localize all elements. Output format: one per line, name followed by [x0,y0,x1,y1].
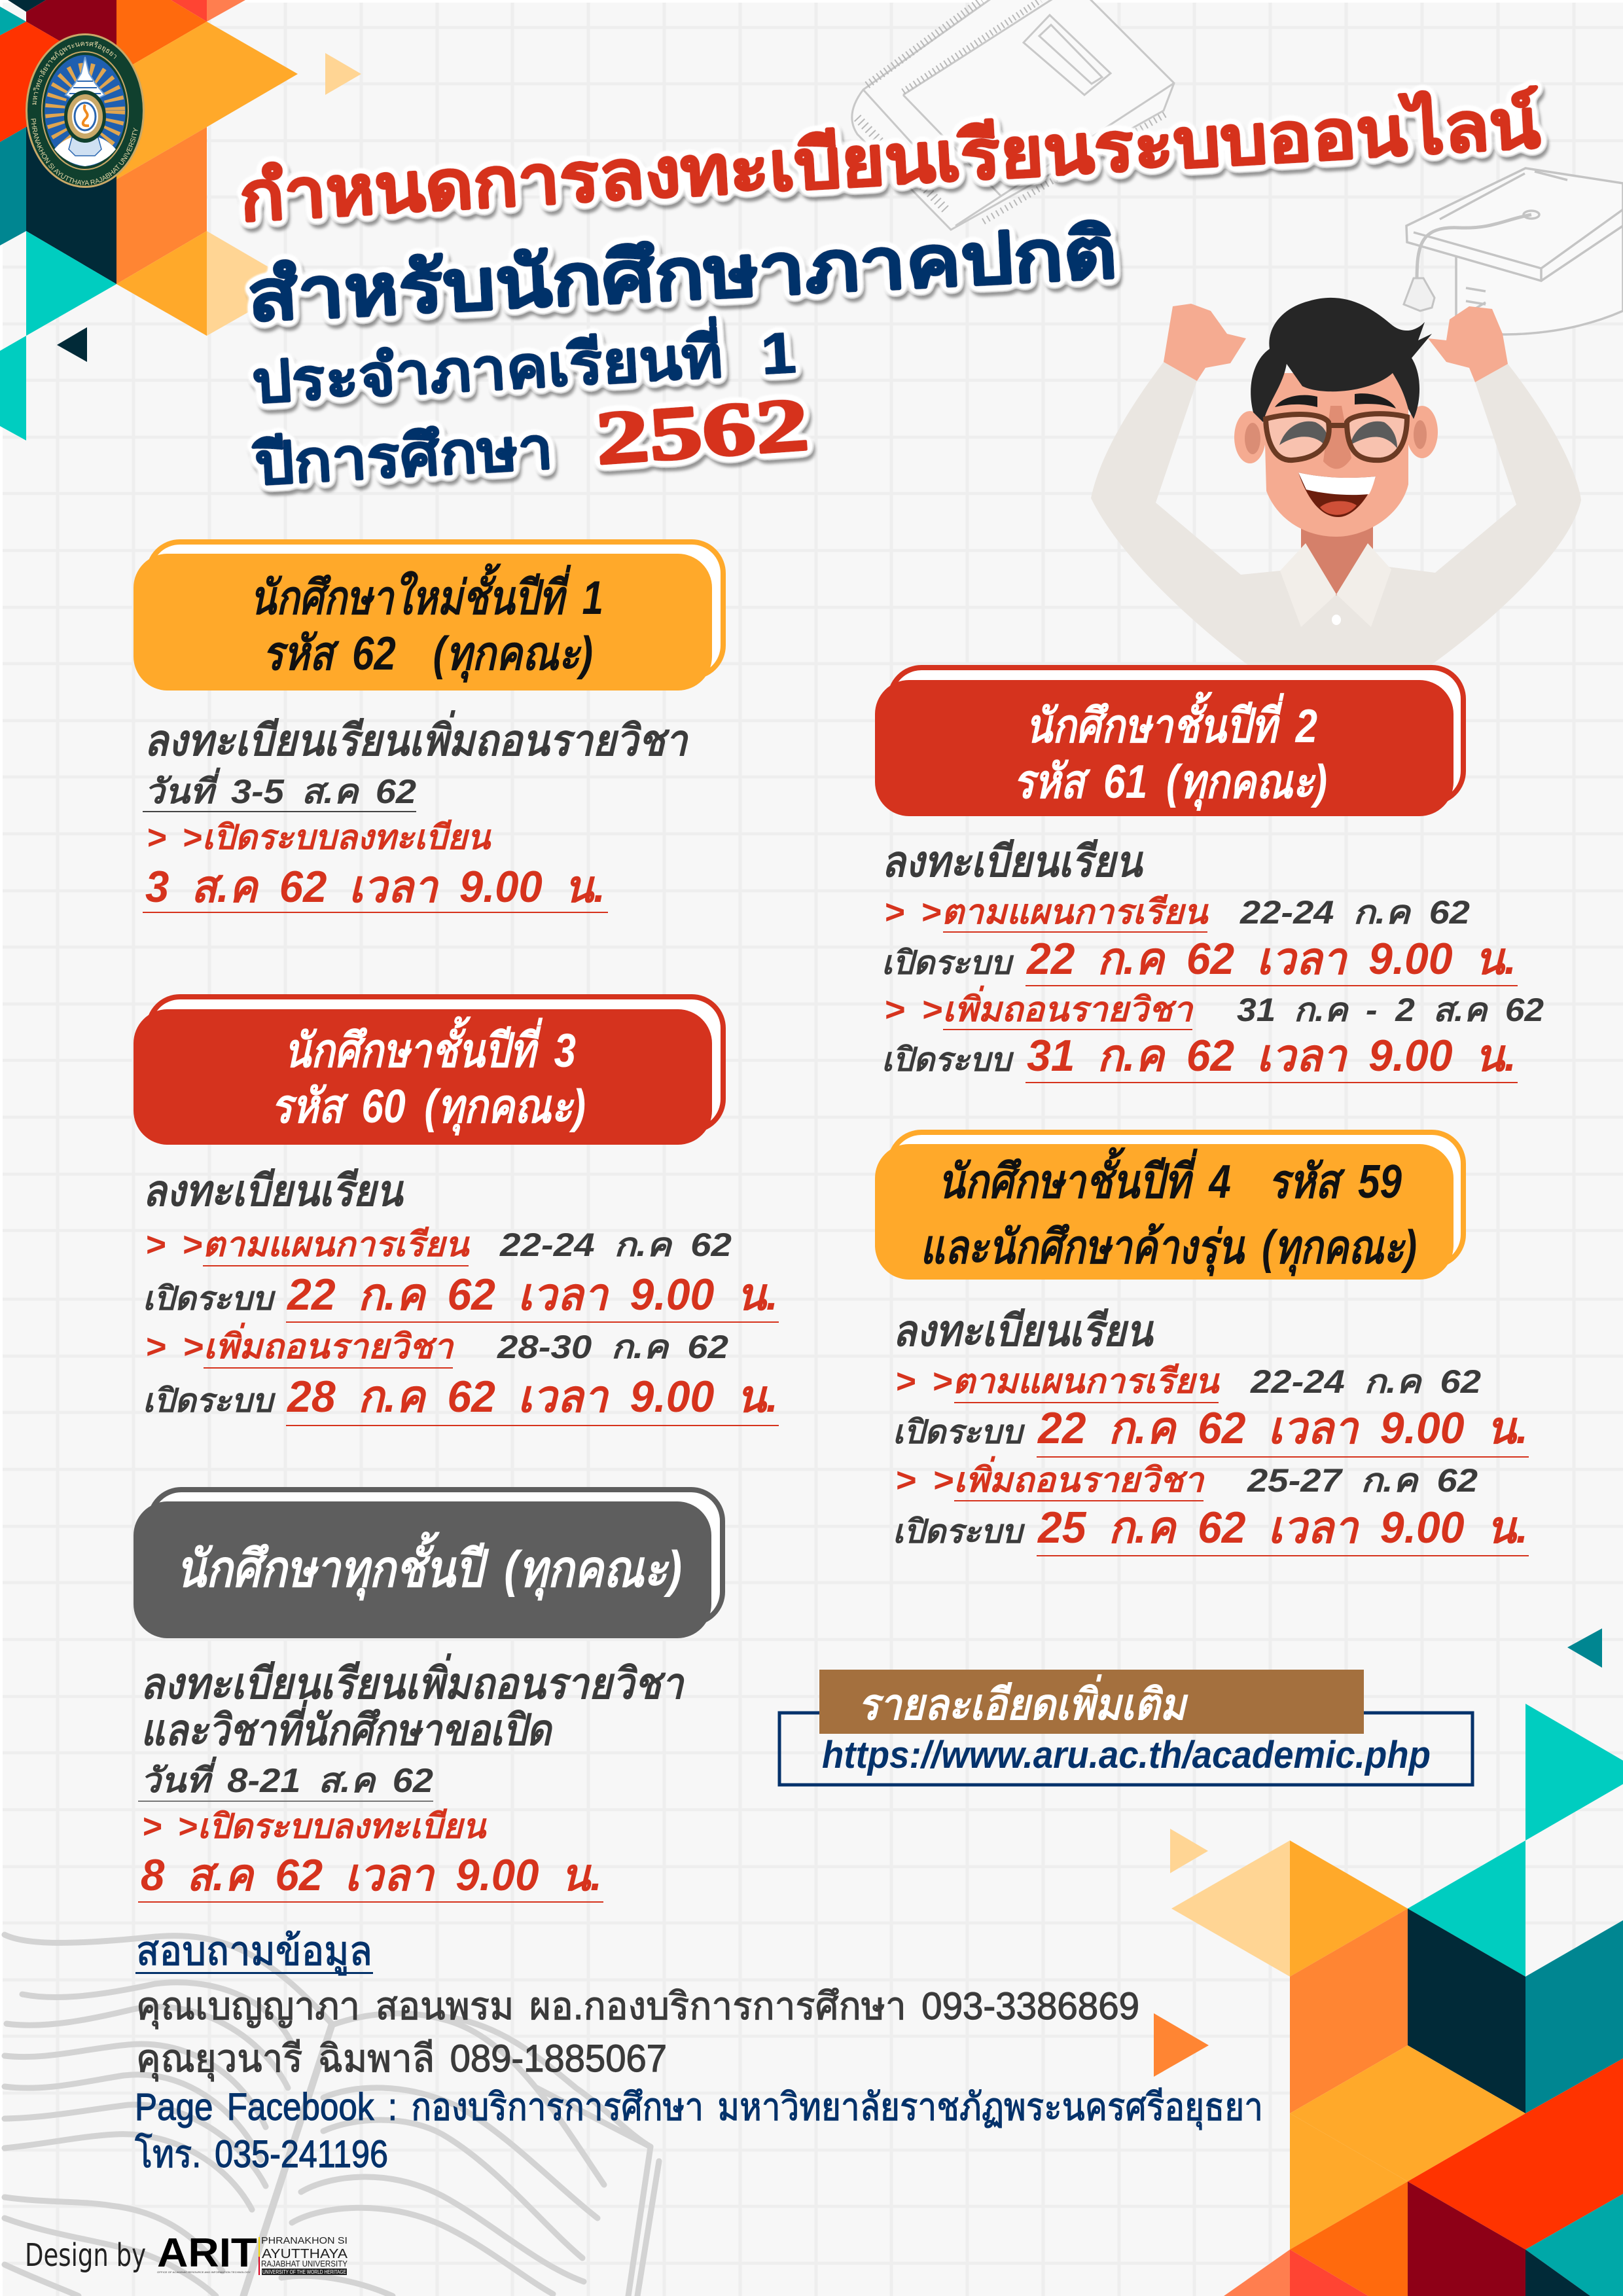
text block: all years dates [138,1653,685,1903]
text block: second year dates: เปิดระบบ [882,1041,1014,1078]
title: line 1: กำหนดการลงทะเบียนเรียนระบบออนไลน์ [238,84,1542,236]
text block: fourth year dates: เปิดระบบ [893,1414,1026,1450]
logo: university seal: มหาวิทยาลัยราชภัฏพระนครศรีอยุธยา [32,42,116,105]
credit: design by ARIT [25,2231,348,2276]
credit: design by ARIT: OFFICE OF ACADEMIC RESOURCE AND INFORMATION TECHNOLOGY [157,2270,251,2274]
text block: third year dates: > >เพิ่มถอนรายวิชา [145,1322,455,1366]
text block: second year dates: > >เพิ่มถอนรายวิชา [884,985,1194,1029]
mouth [1298,473,1376,517]
panel: fourth year heading: และนักศึกษาค้างรุ่น (ทุกคณะ) [920,1221,1417,1276]
text block: third year dates: เปิดระบบ [143,1280,276,1317]
panel: third year heading: รหัส 60 (ทุกคณะ) [271,1081,586,1136]
text block: third year dates: 28-30 ก.ค 62 [497,1329,728,1365]
hands [1164,304,1246,381]
text block: contact information: คุณเบญญาภา สอนพรม ผอ.กองบริการการศึกษา 093-3386869 [136,1985,1139,2030]
text block: second year dates: > >ตามแผนการเรียน [884,893,1209,931]
text block: third year dates: เปิดระบบ [143,1382,276,1419]
title: line 4: ปีการศึกษา [251,416,554,497]
decoration: closed book line art [852,0,1174,230]
text block: fourth year dates: 25-27 ก.ค 62 [1247,1462,1478,1499]
logo: university seal [26,33,145,188]
credit: design by ARIT: AYUTTHAYA [262,2247,348,2261]
panel: third year heading: นักศึกษาชั้นปีที่ 3 [284,1016,576,1077]
text block: third year dates: 28 ก.ค 62 เวลา 9.00 น. [286,1372,778,1422]
nose [1323,406,1351,469]
text block: second year dates [882,837,1544,1083]
text block: contact information: สอบถามข้อมูล [136,1929,372,1975]
callout: more details link [779,1670,1472,1785]
text block: contact information: คุณยุวนารี ฉิมพาลี 089-1885067 [136,2037,667,2082]
ears [1234,411,1266,463]
text block: first year dates: วันที่ 3-5 ส.ค 62 [144,767,416,811]
text block: fourth year dates: 22 ก.ค 62 เวลา 9.00 น. [1037,1403,1528,1453]
callout: more details link: https://www.aru.ac.th/academic.php [822,1734,1431,1776]
text block: third year dates: > >ตามแผนการเรียน [145,1226,471,1264]
panel: first year heading [134,542,723,691]
eyebrows [1275,393,1396,408]
text block: second year dates: 31 ก.ค - 2 ส.ค 62 [1237,992,1544,1028]
panel: second year heading: นักศึกษาชั้นปีที่ 2 [1026,691,1317,753]
text block: all years dates: และวิชาที่นักศึกษาขอเปิด [141,1700,554,1754]
hair [1251,298,1432,422]
title: line 3: ประจำภาคเรียนที่ 1 [250,312,798,415]
panel: second year heading [875,668,1463,816]
text block: first year dates: > >เปิดระบบลงทะเบียน [147,819,491,857]
text block: third year dates: ลงทะเบียนเรียน [143,1166,404,1215]
text block: first year dates: ลงทะเบียนเรียนเพิ่มถอนรายวิชา [144,710,689,764]
text block: all years dates: 8 ส.ค 62 เวลา 9.00 น. [141,1850,602,1900]
credit: design by ARIT: Design by [25,2237,146,2274]
text block: fourth year dates: > >เพิ่มถอนรายวิชา [895,1456,1205,1499]
neck [1301,517,1373,596]
panel: first year heading: รหัส 62 (ทุกคณะ) [262,628,593,683]
text block: fourth year dates: ลงทะเบียนเรียน [893,1306,1154,1355]
text block: all years dates: วันที่ 8-21 ส.ค 62 [140,1756,433,1800]
text block: fourth year dates: > >ตามแผนการเรียน [895,1363,1221,1401]
panel: all years heading [134,1490,722,1638]
panel: fourth year heading: นักศึกษาชั้นปีที่ 4 รหัส 59 [938,1147,1402,1208]
text block: second year dates: เปิดระบบ [882,944,1014,981]
credit: design by ARIT: ARIT [157,2231,257,2276]
text block: third year dates: 22-24 ก.ค 62 [499,1227,732,1263]
panel: fourth year heading [875,1132,1463,1280]
panel: second year heading: รหัส 61 (ทุกคณะ) [1013,756,1327,811]
text block: contact information [135,1929,1263,2176]
credit: design by ARIT: PHRANAKHON SI [261,2235,348,2246]
text block: all years dates: > >เปิดระบบลงทะเบียน [142,1808,487,1846]
text block: fourth year dates: 22-24 ก.ค 62 [1250,1363,1481,1400]
text block: fourth year dates: เปิดระบบ [893,1513,1026,1550]
title: year: 2562 [593,383,812,481]
shirt [1091,362,1581,668]
text block: fourth year dates: 25 ก.ค 62 เวลา 9.00 น. [1037,1503,1528,1552]
eyes [1279,422,1397,448]
text block: third year dates [143,1166,779,1426]
face [1263,373,1408,537]
text block: fourth year dates [893,1306,1529,1556]
text block: all years dates: ลงทะเบียนเรียนเพิ่มถอนรายวิชา [140,1653,685,1708]
decoration: open book line art [5,1935,659,2296]
text block: first year dates [143,710,689,913]
logo: university seal: PHRANAKHON SI AYUTTHAYA RAJABHAT UNIVERSITY [31,118,137,185]
text block: contact information: Page Facebook : กองบริการการศึกษา มหาวิทยาลัยราชภัฏพระนครศรีอยุธยา [135,2086,1263,2130]
text block: second year dates: 22-24 ก.ค 62 [1240,894,1470,931]
triangles: top-left cluster [0,0,361,440]
decoration: graduation cap line art [1404,168,1623,334]
callout: more details link: รายละเอียดเพิ่มเติม [858,1674,1188,1729]
text block: second year dates: 31 ก.ค 62 เวลา 9.00 น. [1027,1031,1516,1081]
text block: first year dates: 3 ส.ค 62 เวลา 9.00 น. [145,862,605,912]
text block: second year dates: 22 ก.ค 62 เวลา 9.00 น. [1026,934,1516,984]
triangles: bottom-right cluster [1154,1628,1623,2296]
panel: first year heading: นักศึกษาใหม่ชั้นปีที่ 1 [250,563,603,624]
text block: contact information: โทร. 035-241196 [135,2132,388,2176]
panel: third year heading [134,997,723,1145]
glasses [1266,414,1407,460]
character: cheering student [1091,298,1581,668]
title: line 2: สำหรับนักศึกษาภาคปกติ [245,213,1118,336]
panel: all years heading: นักศึกษาทุกชั้นปี (ทุกคณะ) [176,1532,682,1601]
credit: design by ARIT: RAJABHAT UNIVERSITY [261,2259,348,2269]
credit: design by ARIT: UNIVERSITY OF THE WORLD HERITAGE [262,2269,346,2275]
collar [1280,543,1391,627]
text block: second year dates: ลงทะเบียนเรียน [882,837,1144,886]
text block: third year dates: 22 ก.ค 62 เวลา 9.00 น. [286,1270,778,1319]
